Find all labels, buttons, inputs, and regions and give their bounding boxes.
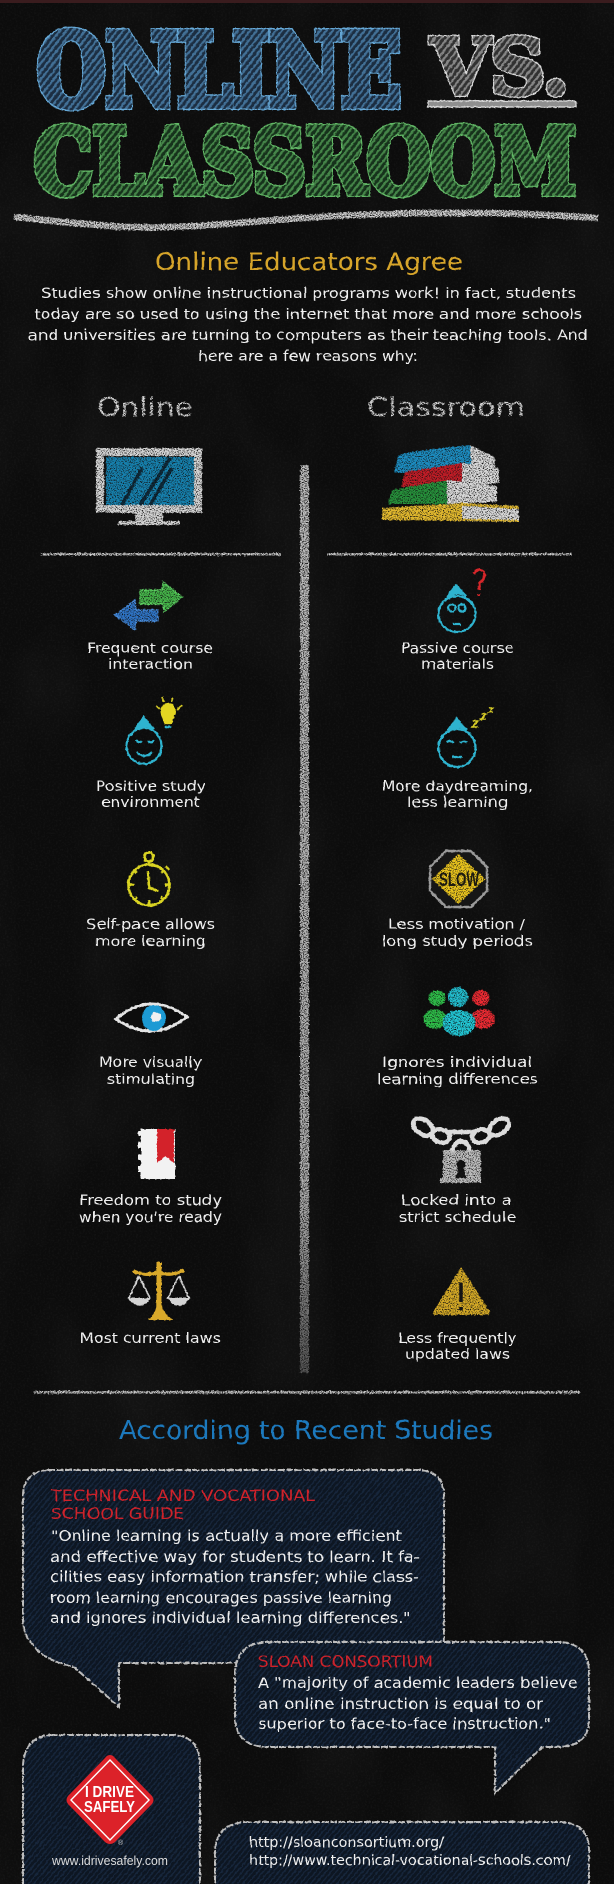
- label: More daydreaming, less learning: More daydreaming,: [382, 779, 533, 795]
- label: Freedom to study when you're ready: when you're ready: [79, 1210, 222, 1226]
- label: Frequent course interaction: Frequent course: [87, 641, 213, 657]
- label: Frequent course interaction: interaction: [108, 657, 193, 673]
- source heading: SLOAN CONSORTIUM: [258, 1652, 433, 1671]
- icon: eye: [116, 1004, 187, 1031]
- label: Less motivation / long study periods: long study periods: [382, 934, 533, 950]
- label: More visually stimulating: stimulating: [107, 1072, 195, 1088]
- intro paragraph: Studies show online instructional programs work! in fact, students: [41, 286, 576, 302]
- title word: Online: ONLINE: [37, 12, 401, 130]
- logo diamond: ®: [118, 1839, 124, 1847]
- left horizontal rule: [41, 553, 281, 555]
- link list: [249, 1835, 571, 1869]
- speech bubble: Sloan Consortium: [235, 1642, 589, 1793]
- icon: slow sign: SLOW: [439, 870, 479, 891]
- speech bubble: Technical and Vocational School Guide: [23, 1470, 444, 1707]
- icon: sleepy face with zzz: [438, 708, 493, 767]
- label: Less frequently updated laws: [398, 1331, 517, 1363]
- heading: According to Recent Studies: According to Recent Studies: [119, 1416, 493, 1446]
- icon: warning triangle: [433, 1267, 490, 1315]
- intro paragraph: today are so used to using the internet that more and more schools: [34, 307, 582, 323]
- section rule: [34, 1391, 580, 1394]
- icon: two arrows: [115, 582, 182, 630]
- intro paragraph: [28, 286, 588, 365]
- title word: vs. with underline: VS.: [430, 23, 569, 113]
- quote text: A "majority of academic leaders believe: [258, 1674, 578, 1692]
- logo panel shape: [23, 1735, 200, 1884]
- label: Positive study environment: Positive study: [96, 779, 206, 795]
- icon: happy face with light bulb: [126, 697, 182, 764]
- quote text: cilities easy information transfer; while class-: [50, 1568, 419, 1586]
- label: Freedom to study when you're ready: [79, 1193, 222, 1226]
- title: Online vs. Classroom: [34, 12, 576, 215]
- logo diamond: [66, 1755, 154, 1847]
- label: Passive course materials: [401, 641, 514, 673]
- icon: monitor: [100, 452, 198, 525]
- label: Ignores individual learning differences: Ignores individual: [382, 1055, 532, 1071]
- chalk underline below title: [14, 213, 598, 227]
- column heading: Classroom: Classroom: [367, 393, 525, 423]
- label: Positive study environment: [96, 779, 206, 811]
- label: Ignores individual learning differences: learning differences: [377, 1072, 538, 1088]
- intro paragraph: and universities are turning to computers as their teaching tools. And: [28, 328, 588, 344]
- heading: Online Educators Agree: Online Educators Agree: [155, 248, 463, 276]
- label: Less frequently updated laws: updated laws: [405, 1347, 510, 1363]
- title word: Online: ONLINE: [37, 12, 401, 130]
- intro paragraph: here are a few reasons why:: [198, 349, 418, 365]
- icon: scales of justice: [129, 1262, 189, 1320]
- icon: stack of books: [382, 445, 519, 522]
- quote text: [258, 1674, 578, 1733]
- quote text: an online instruction is equal to or: [258, 1695, 544, 1713]
- quote text: room learning encourages passive learning: [50, 1589, 392, 1607]
- label: More visually stimulating: More visually: [99, 1055, 202, 1071]
- label: Locked into a strict schedule: [399, 1193, 516, 1226]
- icon: notebook with bookmark: [138, 1129, 175, 1179]
- label: Less motivation / long study periods: [382, 917, 533, 950]
- title word: vs. with underline: VS.: [430, 23, 569, 113]
- right horizontal rule: [327, 553, 572, 555]
- label: Less frequently updated laws: Less frequently: [398, 1331, 517, 1347]
- label: Self-pace allows more learning: more learning: [95, 934, 206, 950]
- icon: stopwatch: [128, 852, 170, 906]
- quote text: and ignores individual learning differences.": [50, 1609, 411, 1627]
- label: Most current laws: Most current laws: [80, 1331, 221, 1347]
- column heading: Online: Online: [97, 393, 193, 423]
- label: More visually stimulating: [99, 1055, 202, 1088]
- source heading: TECHNICAL AND VOCATIONAL: [50, 1486, 315, 1505]
- label: More daydreaming, less learning: [382, 779, 533, 811]
- label: Locked into a strict schedule: Locked into a: [401, 1193, 512, 1209]
- label: Ignores individual learning differences: [377, 1055, 538, 1088]
- icon: puzzled face with question mark: [438, 569, 484, 632]
- links panel shape: [215, 1822, 589, 1884]
- link list: http://www.technical-vocational-schools.com/: [249, 1853, 571, 1869]
- label: Self-pace allows more learning: Self-pace allows: [86, 917, 215, 933]
- panel: source links: [215, 1822, 589, 1884]
- source heading: SCHOOL GUIDE: [51, 1504, 184, 1523]
- bubble shape: [23, 1470, 444, 1707]
- label: Self-pace allows more learning: [86, 917, 215, 950]
- logo diamond: SAFELY: [84, 1799, 136, 1816]
- label: Frequent course interaction: [87, 641, 213, 673]
- label: Less motivation / long study periods: Less motivation /: [388, 917, 525, 933]
- label: More daydreaming, less learning: less learning: [407, 795, 508, 811]
- logo diamond: I DRIVE: [85, 1784, 134, 1801]
- icon: chain and padlock: [410, 1115, 512, 1183]
- label: Freedom to study when you're ready: Freedom to study: [79, 1193, 222, 1209]
- icon: group of colored people: [424, 987, 495, 1036]
- quote text: and effective way for students to learn. It fa-: [50, 1548, 420, 1566]
- quote text: [50, 1527, 420, 1627]
- panel: I Drive Safely logo: [23, 1735, 200, 1884]
- website address: www.idrivesafely.com: [51, 1854, 168, 1868]
- bubble shape: [235, 1642, 589, 1793]
- icon: slow sign: [430, 851, 487, 907]
- label: Locked into a strict schedule: strict schedule: [399, 1210, 516, 1226]
- link list: http://sloanconsortium.org/: [249, 1835, 444, 1851]
- label: Passive course materials: Passive course: [401, 641, 514, 657]
- label: Passive course materials: materials: [421, 657, 494, 673]
- quote text: superior to face-to-face instruction.": [258, 1715, 551, 1733]
- center vertical divider: [300, 465, 309, 1373]
- source heading: [50, 1486, 315, 1523]
- label: Positive study environment: environment: [101, 795, 200, 811]
- quote text: "Online learning is actually a more efficient: [51, 1527, 402, 1545]
